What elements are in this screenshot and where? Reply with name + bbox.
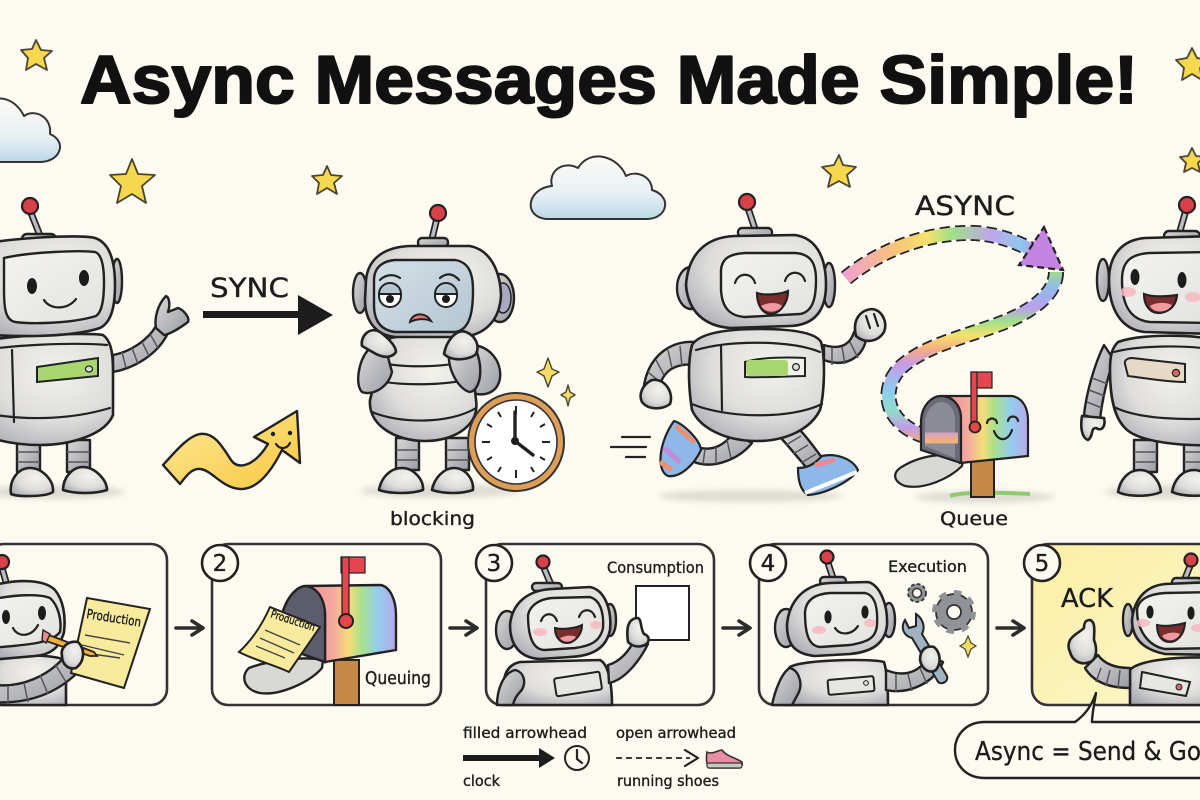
step number 4 — [750, 545, 786, 581]
pencil — [42, 630, 97, 656]
robot 2: bored, blocked — [353, 205, 520, 498]
step number 2 — [202, 545, 238, 581]
speech bubble — [955, 693, 1200, 778]
queuing label: Queuing — [365, 668, 431, 689]
mailbox with face — [895, 372, 1055, 503]
decorative stars — [21, 40, 1200, 203]
legend: filled arrowhead: clock — [463, 772, 500, 790]
note paper: Production — [85, 607, 142, 631]
robot 4: happy receiver — [1081, 197, 1200, 499]
title: Async Messages Made Simple! — [80, 42, 1138, 118]
arrow 1 to 2 — [176, 621, 203, 635]
note in mailbox: Production — [269, 607, 317, 634]
cloud top left — [0, 98, 60, 162]
sync label: SYNC — [210, 273, 289, 304]
legend: open arrowhead: running shoes — [617, 772, 719, 790]
panel 2: queuing — [212, 544, 441, 705]
gears — [908, 584, 972, 630]
step number 4: 4 — [761, 551, 775, 577]
clock — [468, 393, 564, 491]
legend: filled arrowhead: filled arrowhead — [463, 724, 587, 742]
arrow 3 to 4 — [723, 621, 750, 635]
smiling yellow arrow — [163, 411, 300, 489]
step number 5 — [1024, 545, 1060, 581]
rainbow dashed path — [846, 227, 1063, 438]
panel 5: ack — [1032, 544, 1200, 705]
panel 1: production — [0, 544, 167, 705]
note paper — [71, 598, 150, 688]
blank card — [636, 586, 689, 640]
panel 3: consumption — [486, 544, 714, 705]
sparkles near clock — [537, 358, 575, 406]
wrench — [903, 614, 947, 683]
panel 4: execution — [759, 544, 988, 705]
async label: ASYNC — [915, 191, 1015, 222]
step number 2: 2 — [213, 551, 227, 577]
arrow 4 to 5 — [997, 621, 1024, 635]
execution label: Execution — [888, 557, 967, 576]
robot 3: running — [611, 194, 885, 502]
step number 3: 3 — [487, 551, 501, 577]
cloud middle — [531, 156, 665, 219]
step number 5: 5 — [1035, 551, 1049, 577]
queue label: Queue — [940, 508, 1008, 530]
robot 1: friendly sender — [0, 198, 188, 499]
sync arrow — [203, 295, 333, 335]
arrow 2 to 3 — [450, 621, 477, 635]
step number 3 — [476, 545, 512, 581]
consumption label: Consumption — [607, 558, 704, 577]
note in mailbox — [239, 607, 320, 672]
legend: filled arrowhead — [463, 724, 589, 790]
blocking label: blocking — [390, 508, 475, 530]
legend: open arrowhead: open arrowhead — [616, 724, 736, 742]
panel 5: ack: ACK — [1061, 584, 1114, 614]
legend: open arrowhead — [616, 724, 742, 790]
